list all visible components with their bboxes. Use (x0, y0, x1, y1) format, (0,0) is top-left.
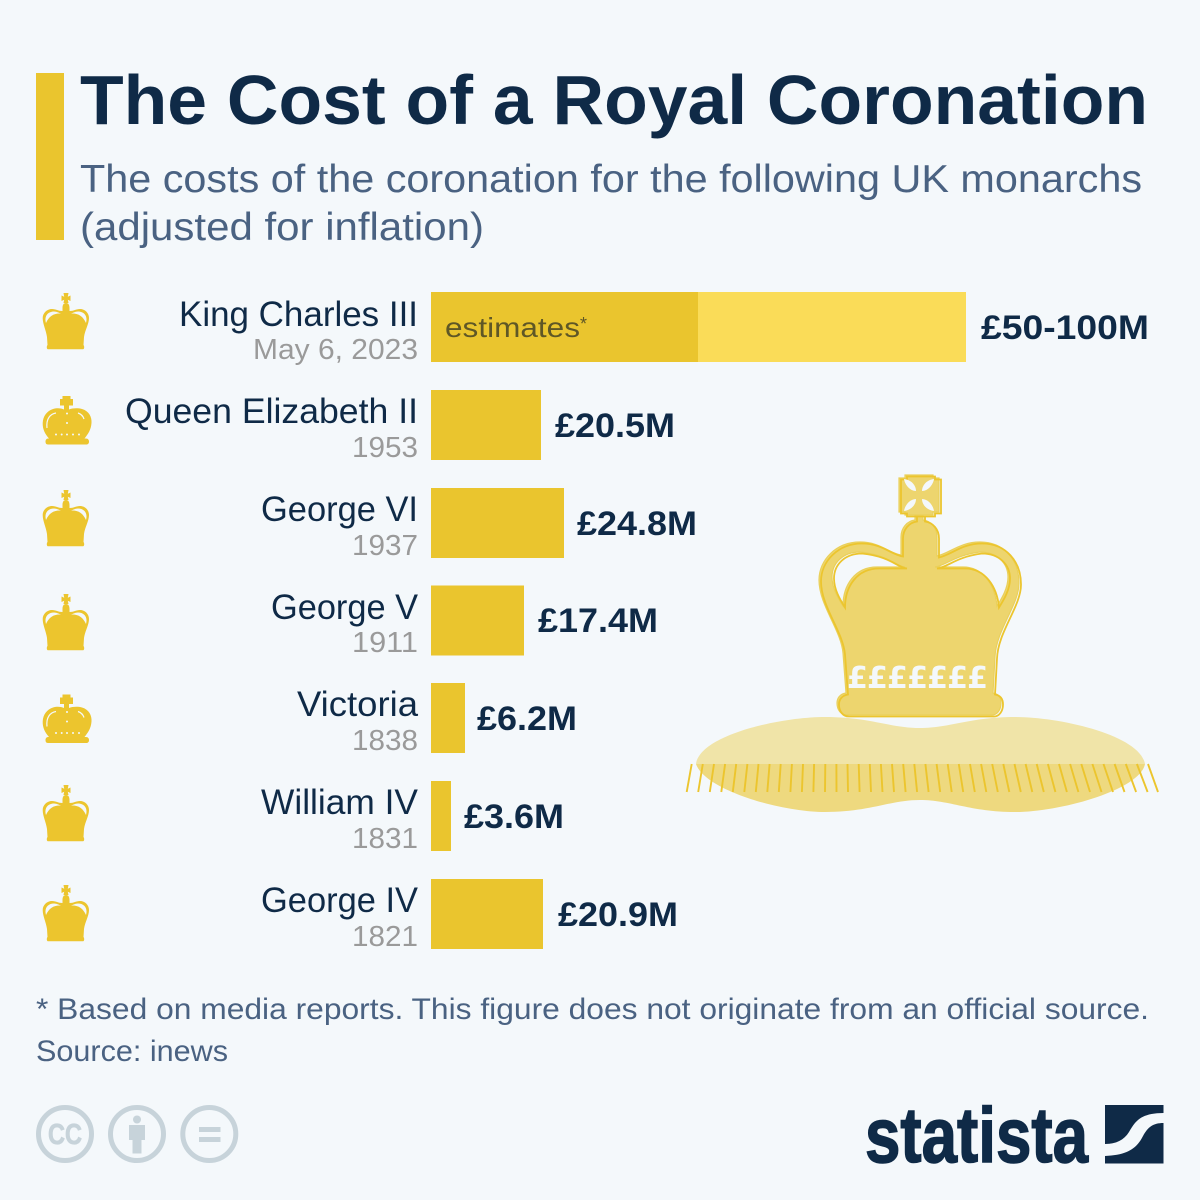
bar (431, 488, 564, 558)
label: Queen Elizabeth II: 1953 (352, 432, 418, 464)
bar (431, 781, 451, 851)
row: George VI (43, 488, 697, 562)
value: £3.6M (464, 798, 564, 836)
icon: crown (43, 594, 89, 650)
value: £17.4M (538, 602, 658, 640)
bar: high estimate (698, 292, 966, 362)
pound signs: £££££££ (847, 661, 988, 696)
label: George IV: George IV (261, 881, 419, 920)
subtitle: The costs of the coronation for the following UK monarchs (80, 158, 1142, 201)
subtitle: (adjusted for inflation) (80, 206, 484, 249)
bar (431, 390, 541, 460)
label: George V: George V (271, 588, 419, 627)
label: Queen Elizabeth II (125, 392, 418, 464)
icon: round crown (43, 694, 92, 743)
row: George V (43, 586, 658, 659)
value: £20.9M (558, 896, 678, 934)
label: George VI: 1937 (352, 530, 418, 562)
label: George IV (261, 881, 419, 953)
title: The Cost of a Royal Coronation (80, 61, 1148, 139)
label: King Charles III (179, 295, 418, 366)
footnote and source: Source: inews (36, 1035, 228, 1068)
label: William IV: William IV (261, 783, 419, 822)
footnote and source (36, 993, 1149, 1068)
label: Queen Elizabeth II: Queen Elizabeth II (125, 392, 418, 431)
icon: no derivatives (183, 1108, 236, 1160)
bar annotation: estimates: estimates (445, 312, 580, 343)
label: King Charles III: King Charles III (179, 295, 418, 334)
bar: low estimate (431, 292, 698, 362)
row: Queen Elizabeth II (43, 390, 675, 464)
value: £6.2M (477, 700, 577, 738)
value: £20.5M (555, 407, 675, 445)
icon: round crown (43, 396, 92, 444)
row: George IV (43, 879, 678, 953)
icon: creative commons (38, 1108, 92, 1160)
bar annotation: estimates: * (580, 314, 587, 334)
label: George V (271, 588, 419, 659)
label: George V: 1911 (352, 627, 418, 659)
icon: crown (43, 785, 89, 841)
subtitle (80, 158, 1142, 249)
large crown (819, 475, 1021, 716)
value: £24.8M (577, 505, 697, 543)
label: Victoria: Victoria (297, 685, 419, 724)
value: £50-100M (981, 309, 1149, 347)
label: William IV (261, 783, 419, 855)
label: Victoria: 1838 (352, 725, 418, 757)
label: William IV: 1831 (352, 823, 418, 855)
cushion (687, 717, 1158, 812)
bar (431, 879, 543, 949)
label: King Charles III: May 6, 2023 (253, 334, 418, 366)
bar (431, 586, 524, 656)
icon: crown (43, 293, 89, 349)
label: Victoria (297, 685, 419, 757)
row: King Charles III (43, 292, 1149, 366)
label: George IV: 1821 (352, 921, 418, 953)
title accent bar (36, 73, 64, 240)
illustration: crown on cushion (687, 475, 1158, 812)
footnote and source: * Based on media reports. This figure does not originate from an official source. (36, 993, 1149, 1026)
icon: creative commons: CC (48, 1119, 82, 1151)
label: George VI: George VI (261, 490, 418, 529)
icon: crown (43, 885, 89, 941)
icon: crown (43, 490, 89, 546)
label: George VI (261, 490, 418, 562)
icon: attribution (110, 1108, 164, 1160)
bar (431, 683, 465, 753)
logo: statista mark (1105, 1105, 1164, 1164)
row: Victoria (43, 683, 577, 757)
row: William IV (43, 781, 564, 855)
logo: statista wordmark: statista (865, 1091, 1088, 1179)
